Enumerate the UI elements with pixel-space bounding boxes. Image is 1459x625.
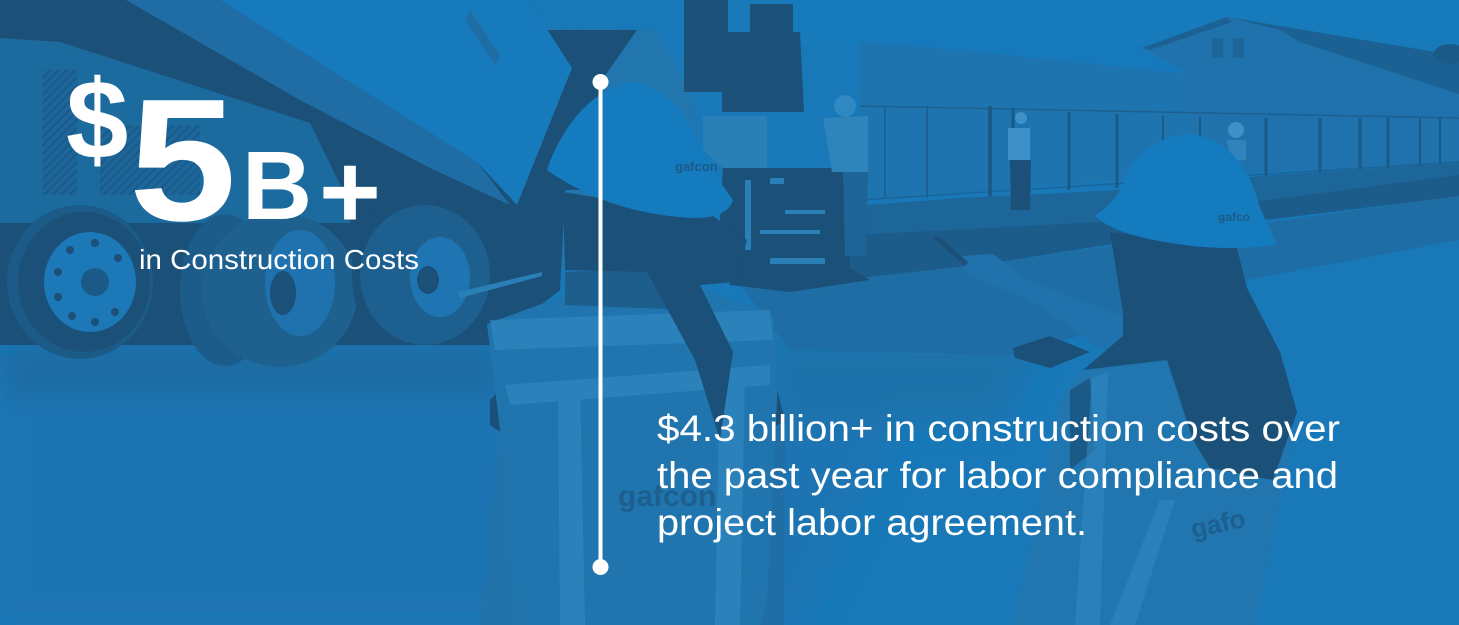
right worker	[933, 134, 1297, 625]
headline stat: $5B+: $	[66, 57, 128, 182]
white tent	[790, 0, 1190, 200]
headline stat: $5B+: +	[319, 133, 381, 251]
headline stat: $5B+	[66, 57, 381, 257]
sidewalk and dark asphalt	[800, 163, 1459, 285]
ground tones	[0, 340, 1040, 625]
paving machine	[537, 0, 870, 292]
dump truck body	[0, 0, 572, 345]
stat caption: in Construction Costs	[139, 244, 419, 275]
truck wheels	[7, 205, 542, 367]
description text: project labor agreement.	[657, 502, 1087, 543]
distant workers	[823, 95, 1246, 256]
building on right	[1142, 17, 1459, 175]
headline stat: $5B+: B	[242, 131, 312, 240]
headline stat: $5B+: 5	[129, 63, 236, 257]
left worker	[480, 82, 785, 625]
left vest logo: gafcon	[618, 480, 716, 513]
description text: $4.3 billion+ in construction costs over	[657, 408, 1340, 449]
left helmet logo: gafcon	[675, 159, 718, 174]
vertical divider with end dots	[592, 74, 608, 575]
description text: the past year for labor compliance and	[657, 455, 1338, 496]
description text	[657, 408, 1340, 543]
left hard hat	[547, 82, 733, 218]
chain-link fence	[860, 106, 1459, 200]
gravel band beyond the curb	[740, 195, 1459, 355]
sky	[780, 0, 1459, 45]
right helmet logo: gafco	[1218, 210, 1250, 224]
right vest logo: gafo	[1188, 503, 1248, 544]
right hard hat	[1095, 134, 1277, 248]
